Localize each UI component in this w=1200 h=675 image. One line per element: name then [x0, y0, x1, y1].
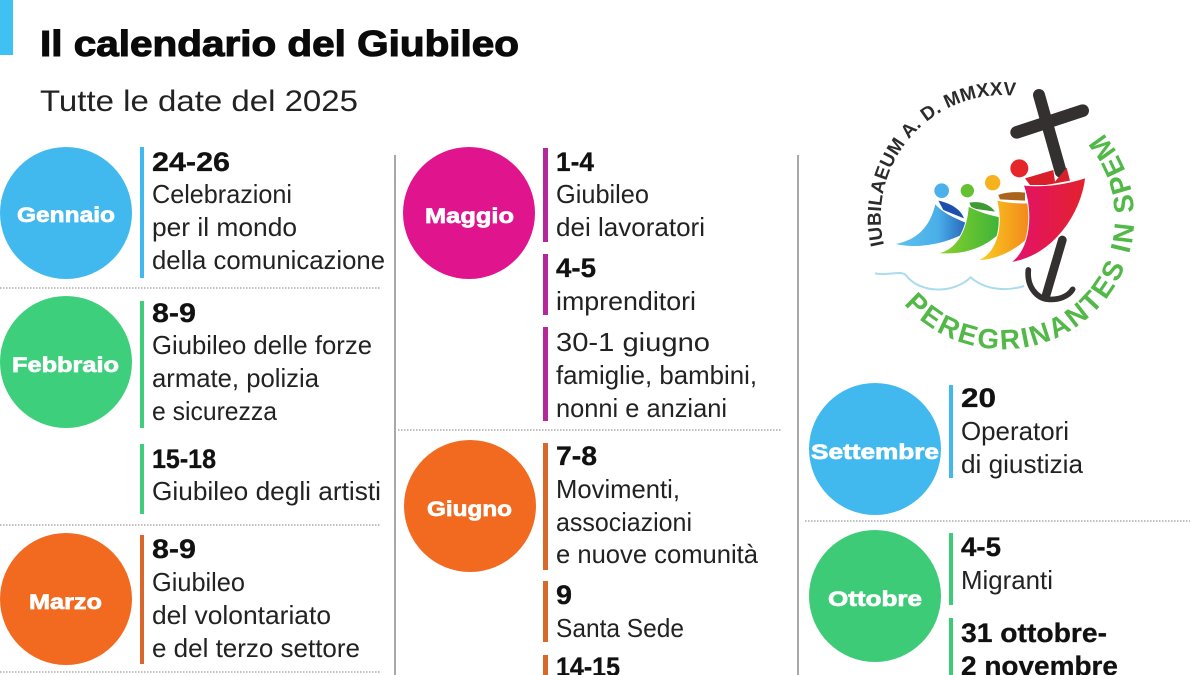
- title: Il calendario del Giubileo: [40, 23, 519, 64]
- panel: Giugno: associazioni: [556, 507, 692, 537]
- panel: Marzo: del volontariato: [152, 600, 331, 630]
- panel: Febbraio: Giubileo delle forze: [152, 330, 372, 360]
- panel: Gennaio: [0, 147, 385, 279]
- logo lettering: IUBILAEUM A. D. MMXXV: IUBILAEUM A. D. MMXXV: [868, 82, 1016, 246]
- panel: Marzo: Giubileo: [152, 567, 245, 597]
- panel: Maggio: 1-4: [556, 147, 594, 177]
- panel: Maggio: Maggio: [425, 204, 514, 228]
- panel: Gennaio: Celebrazioni: [152, 179, 292, 209]
- panel: Ottobre: 4-5: [961, 532, 1001, 562]
- panel: Febbraio: [0, 296, 381, 514]
- panel: Maggio: 30-1 giugno: [556, 327, 710, 357]
- panel: Maggio: famiglie, bambini,: [556, 360, 757, 390]
- panel: Maggio: dei lavoratori: [556, 212, 705, 242]
- panel: Febbraio: Febbraio: [12, 353, 119, 377]
- panel: Giugno: Santa Sede: [556, 613, 684, 643]
- column dividers: [395, 155, 798, 675]
- panel: Maggio: imprenditori: [556, 286, 696, 316]
- panel: Settembre: 20: [961, 383, 996, 413]
- panel: Settembre: [809, 383, 1084, 515]
- panel: Giugno: [404, 440, 759, 675]
- panel: Ottobre: Ottobre: [828, 587, 922, 611]
- logo lettering: PEREGRINANTES IN SPEM: PEREGRINANTES IN SPEM: [905, 134, 1134, 350]
- panel: Febbraio: 15-18: [152, 444, 216, 474]
- accent tab: [0, 0, 13, 55]
- panel: Febbraio: e sicurezza: [152, 396, 278, 426]
- logo figures: [875, 95, 1086, 299]
- panel: Maggio: Giubileo: [556, 179, 649, 209]
- panel: Settembre: Operatori: [961, 416, 1069, 446]
- panel: Gennaio: Gennaio: [17, 203, 115, 227]
- panel: Ottobre: 31 ottobre-: [961, 618, 1107, 648]
- panel: Settembre: Settembre: [811, 440, 939, 464]
- panel: Gennaio: per il mondo: [152, 212, 297, 242]
- panel: Maggio: nonni e anziani: [556, 393, 727, 423]
- subtitle: Tutte le date del 2025: [40, 85, 358, 118]
- panel: Marzo: 8-9: [152, 534, 196, 564]
- panel: Giugno: 9: [556, 580, 572, 610]
- panel: Maggio: 4-5: [556, 253, 596, 283]
- panel: Gennaio: della comunicazione: [152, 245, 385, 275]
- panel: Ottobre: Migranti: [961, 565, 1053, 595]
- panel: Maggio: [403, 147, 757, 423]
- panel: Marzo: Marzo: [29, 590, 102, 614]
- panel: Giugno: e nuove comunità: [556, 539, 759, 569]
- panel: Febbraio: 8-9: [152, 298, 196, 328]
- icon: Jubilee logo: [868, 82, 1134, 350]
- panel: Marzo: [0, 533, 360, 665]
- panel: Marzo: e del terzo settore: [152, 633, 360, 663]
- panel: Gennaio: 24-26: [152, 147, 230, 177]
- panel: Settembre: di giustizia: [961, 449, 1084, 479]
- panel: Febbraio: armate, polizia: [152, 363, 320, 393]
- panel: Ottobre: [809, 530, 1118, 675]
- panel: Giugno: Giugno: [427, 497, 512, 521]
- panel: Febbraio: Giubileo degli artisti: [152, 476, 381, 506]
- panel: Giugno: Movimenti,: [556, 474, 680, 504]
- panel: Giugno: 7-8: [556, 441, 597, 471]
